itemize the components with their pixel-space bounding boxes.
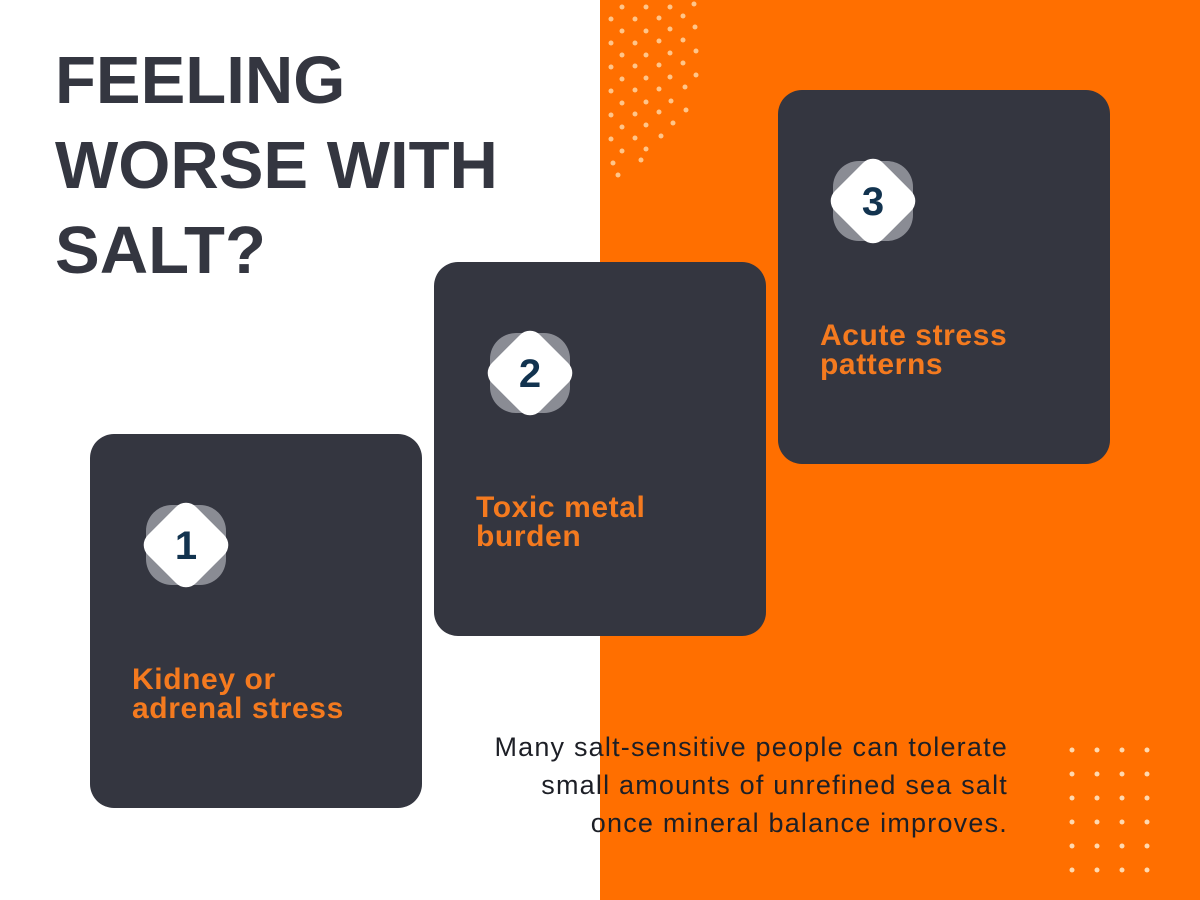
badge 2: 2 — [519, 352, 541, 396]
note text: once mineral balance improves. — [591, 808, 1008, 838]
card 3: acute stress patterns — [778, 90, 1110, 464]
card 1: kidney or adrenal stress — [90, 434, 422, 808]
title: WORSE WITH — [55, 128, 498, 203]
card 2 text: Toxic metal — [476, 491, 645, 524]
card 2 text — [476, 491, 645, 553]
card 2: toxic metal burden — [434, 262, 766, 636]
note text: small amounts of unrefined sea salt — [541, 770, 1008, 800]
card 1 text: Kidney or — [132, 663, 276, 696]
badge 3: 3 — [862, 180, 884, 224]
card 1 text — [132, 663, 344, 725]
orange background panel — [600, 0, 1200, 900]
badge 1 — [144, 502, 228, 588]
badge 1: 1 — [175, 524, 197, 568]
title — [55, 43, 498, 288]
card 1 text: adrenal stress — [132, 692, 344, 725]
note text — [494, 732, 1008, 838]
card 2 text: burden — [476, 520, 581, 553]
card 3 text — [820, 319, 1007, 381]
title: SALT? — [55, 213, 266, 288]
card 3 text: Acute stress — [820, 319, 1007, 352]
badge 2 — [488, 330, 572, 416]
title: FEELING — [55, 43, 345, 118]
note text: Many salt-sensitive people can tolerate — [494, 732, 1008, 762]
card 3 text: patterns — [820, 348, 943, 381]
badge 3 — [830, 158, 916, 244]
